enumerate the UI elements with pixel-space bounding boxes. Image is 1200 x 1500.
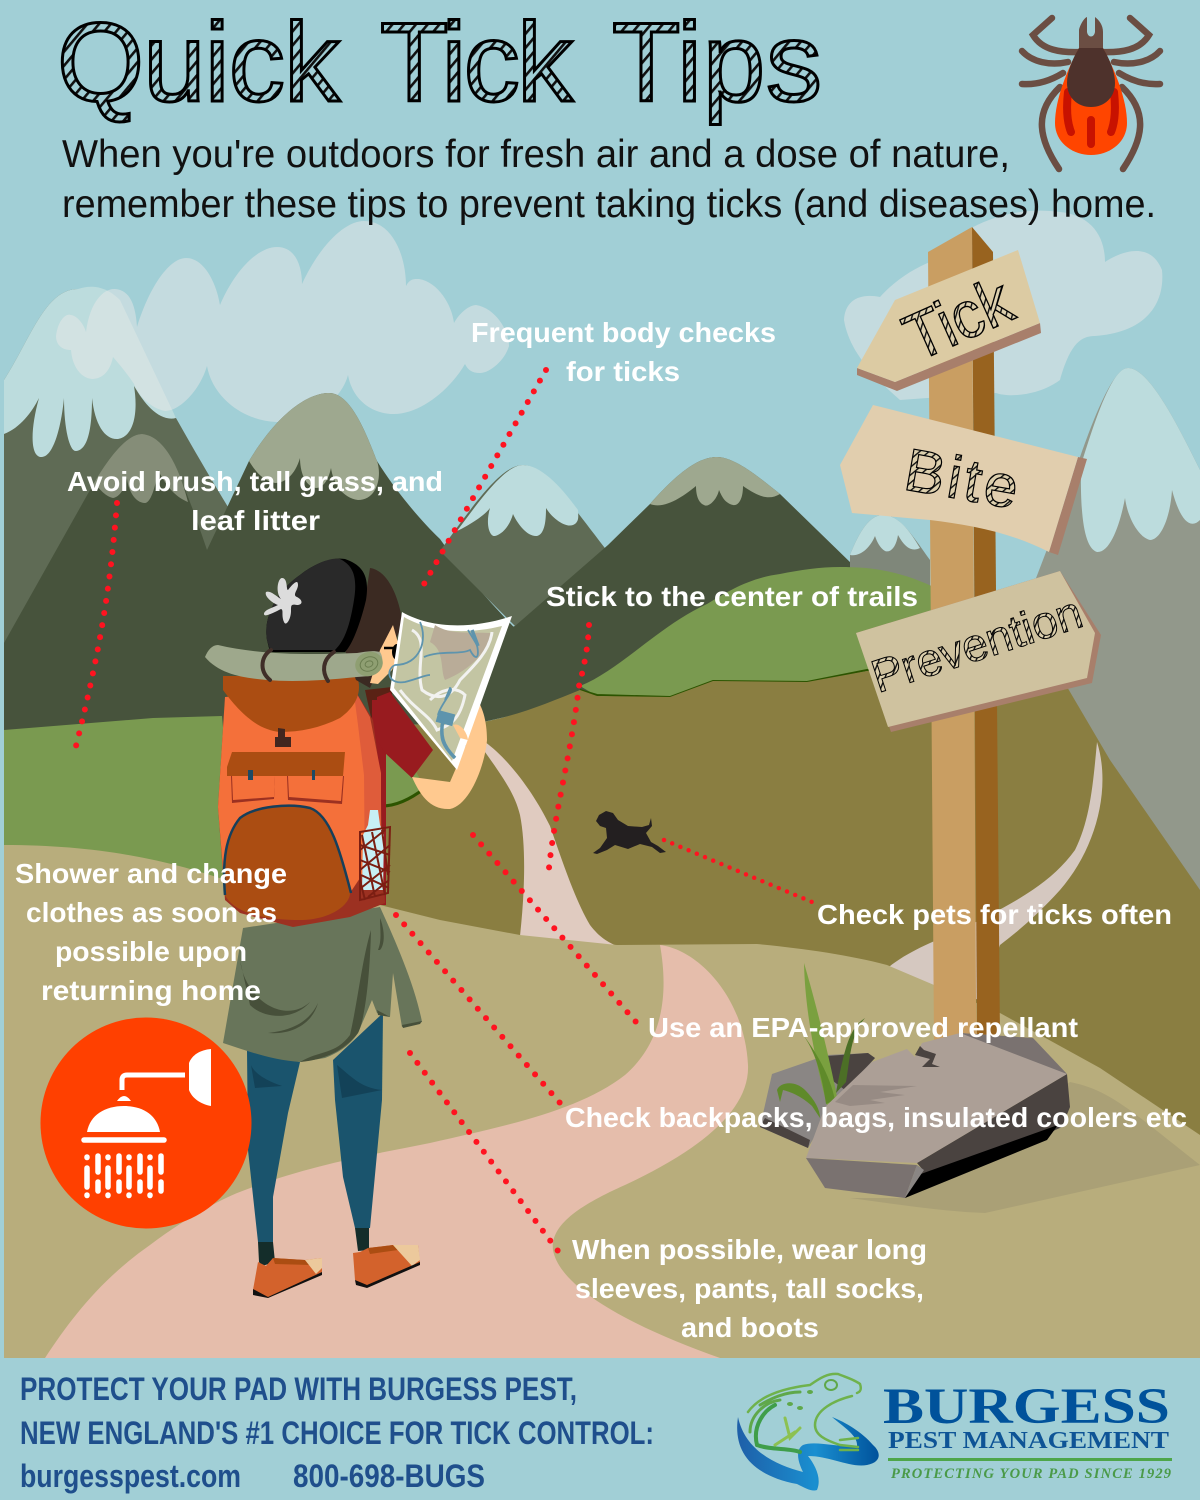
post: light face: [928, 227, 977, 1040]
title: Quick: [57, 0, 341, 125]
bag: pockets: [231, 776, 344, 804]
grass: blades: [804, 963, 837, 1105]
hill: green center: [580, 567, 940, 698]
bag: orange front: [218, 687, 375, 895]
tip: repellant: Use an EPA-approved repellant: [648, 1012, 1078, 1043]
ground: darker patch by rock: [850, 1082, 1200, 1213]
legs: [247, 1013, 383, 1242]
bag: pocket zip: [224, 806, 351, 895]
bag: water bottle: [362, 810, 384, 890]
bag: side stripe: [353, 687, 381, 890]
bag: buckle: [275, 728, 291, 747]
leader: backpacks: [396, 915, 560, 1103]
tip: avoid brush: Avoid brush, tall grass, and: [67, 466, 443, 497]
bag: hood: [223, 676, 359, 732]
tick markings: [1067, 92, 1115, 144]
footer call to action: [20, 1371, 654, 1494]
tip: pets: Check pets for ticks often: [817, 899, 1172, 930]
dotted leader lines: [76, 370, 812, 1251]
tip: clothing: [572, 1234, 927, 1343]
tip: body checks: for ticks: [566, 356, 680, 387]
map: white roads: [400, 630, 492, 730]
post: dark face: [972, 227, 1000, 1040]
jacket tied at waist: [223, 907, 422, 1062]
bedroll: [205, 645, 386, 681]
cloud: left: [56, 221, 509, 422]
mountain: center dark peak: [485, 457, 850, 722]
intro text: remember these tips to prevent taking ticks (and diseases) home.: [62, 183, 1156, 226]
tip: center of trails: Stick to the center of trails: [546, 581, 918, 612]
rock: right side: [905, 1074, 1070, 1198]
logo: Burgess Pest Management: [737, 1374, 1172, 1491]
tip: shower: returning home: [41, 975, 261, 1006]
shoe: left: [253, 1258, 322, 1298]
icon: tick: [1022, 17, 1160, 169]
footer call to action: burgesspest.com: [20, 1458, 241, 1494]
logo: Burgess Pest Management: PROTECTING YOUR PAD SINCE 1929: [891, 1466, 1171, 1482]
shower icon: [84, 1049, 211, 1196]
shower badge: [40, 1018, 252, 1228]
shirt sleeve shoulder: [365, 687, 392, 718]
rock: front face: [806, 1158, 917, 1198]
rock: top face: [806, 1033, 1067, 1163]
tip: shower: Shower and change: [15, 858, 287, 889]
logo: wordmark: BURGESS: [883, 1379, 1170, 1435]
footer call to action: NEW ENGLAND'S #1 CHOICE FOR TICK CONTROL:: [20, 1415, 654, 1451]
trail: far right path: [880, 742, 1102, 1000]
beanie hat: [264, 559, 367, 652]
tip: clothing: When possible, wear long: [572, 1234, 927, 1265]
sign: Tick: [857, 250, 1041, 391]
tick body: [1055, 48, 1127, 155]
socks: [258, 1228, 369, 1266]
ground: olive field: [380, 670, 1200, 1135]
shirt sleeve: [377, 692, 433, 778]
rock: shade: [835, 1085, 917, 1106]
patch: green behind arm: [386, 754, 420, 808]
rocks and grass: [760, 963, 1070, 1198]
sign: Prevention: Prevention: [865, 586, 1088, 703]
leader: avoid brush: [76, 503, 117, 746]
tick mouthparts: [1079, 17, 1103, 49]
thumb: [453, 724, 468, 740]
sign: Bite: [840, 405, 1087, 555]
map: white paper: [390, 612, 512, 770]
mountain: back left: [4, 286, 228, 643]
title: [57, 0, 822, 125]
ground: tan foreground: [4, 845, 1200, 1358]
logo: water swoop: [737, 1417, 879, 1491]
hiker figure: [205, 559, 512, 1298]
cloud: right behind signpost: [844, 211, 1162, 400]
intro text: When you're outdoors for fresh air and a dose of nature,: [62, 133, 1010, 176]
mountain: right grey: [1036, 368, 1200, 890]
tip: shower: possible upon: [55, 936, 247, 967]
leader: center of trails: [549, 625, 589, 868]
rock: back: [760, 1053, 875, 1148]
tick legs: [1022, 18, 1160, 169]
tip: avoid brush: [67, 466, 443, 536]
logo: Burgess Pest Management: PEST MANAGEMENT: [888, 1428, 1169, 1454]
flower on hat: [264, 578, 302, 624]
landscape scene: [4, 211, 1200, 1358]
map: blue marker: [436, 710, 455, 726]
straps: [263, 650, 334, 681]
intro text: [62, 133, 1156, 226]
tip: backpacks: Check backpacks, bags, insulated coolers etc: [565, 1102, 1187, 1133]
bag: main pocket: [224, 806, 350, 920]
signpost: [928, 227, 1000, 1040]
hair: [345, 568, 403, 688]
leader: body checks: [424, 370, 546, 584]
leader: pets: [664, 840, 812, 902]
trail: upper light path: [485, 742, 617, 946]
mountain: left dark range: [4, 393, 514, 730]
leader: clothing: [410, 1053, 558, 1251]
sign: Tick: Tick: [893, 262, 1024, 375]
map: [389, 612, 512, 770]
face: [370, 625, 402, 684]
bag: base: [218, 687, 385, 927]
footer call to action: 800-698-BUGS: [293, 1458, 485, 1494]
rock: crack: [915, 1046, 940, 1067]
footer call to action: PROTECT YOUR PAD WITH BURGESS PEST,: [20, 1371, 577, 1407]
backpack: [218, 676, 390, 927]
title: Tick: [380, 0, 574, 125]
trail: pink foreground path: [45, 945, 748, 1358]
map: blue river: [389, 622, 478, 758]
tip: shower: [15, 858, 287, 1006]
sign: Prevention: [856, 571, 1101, 732]
tip: shower: clothes as soon as: [26, 897, 277, 928]
tip: avoid brush: leaf litter: [191, 505, 320, 536]
tip: clothing: and boots: [681, 1312, 819, 1343]
sign: Bite: Bite: [900, 436, 1024, 522]
logo: frog: [748, 1374, 861, 1452]
dog silhouette: [593, 811, 666, 854]
map: inner sheet: [394, 617, 502, 761]
shoe: right: [353, 1245, 420, 1288]
tick head: [1067, 48, 1115, 107]
mountain: small behind signpost: [850, 516, 930, 586]
arm and hand: [412, 697, 487, 809]
bag: mesh pocket: [360, 827, 390, 900]
tip: body checks: Frequent body checks: [471, 317, 776, 348]
tip: body checks: [471, 317, 776, 387]
map: tan area: [430, 625, 490, 680]
leader: repellant: [473, 835, 636, 1022]
tip: clothing: sleeves, pants, tall socks,: [575, 1273, 924, 1304]
bag: flap: [227, 752, 345, 776]
title: Tips: [612, 0, 822, 125]
shirt side behind bag: [372, 700, 386, 905]
hill: green left: [4, 716, 223, 878]
mountain: center snow peak: [442, 465, 605, 626]
